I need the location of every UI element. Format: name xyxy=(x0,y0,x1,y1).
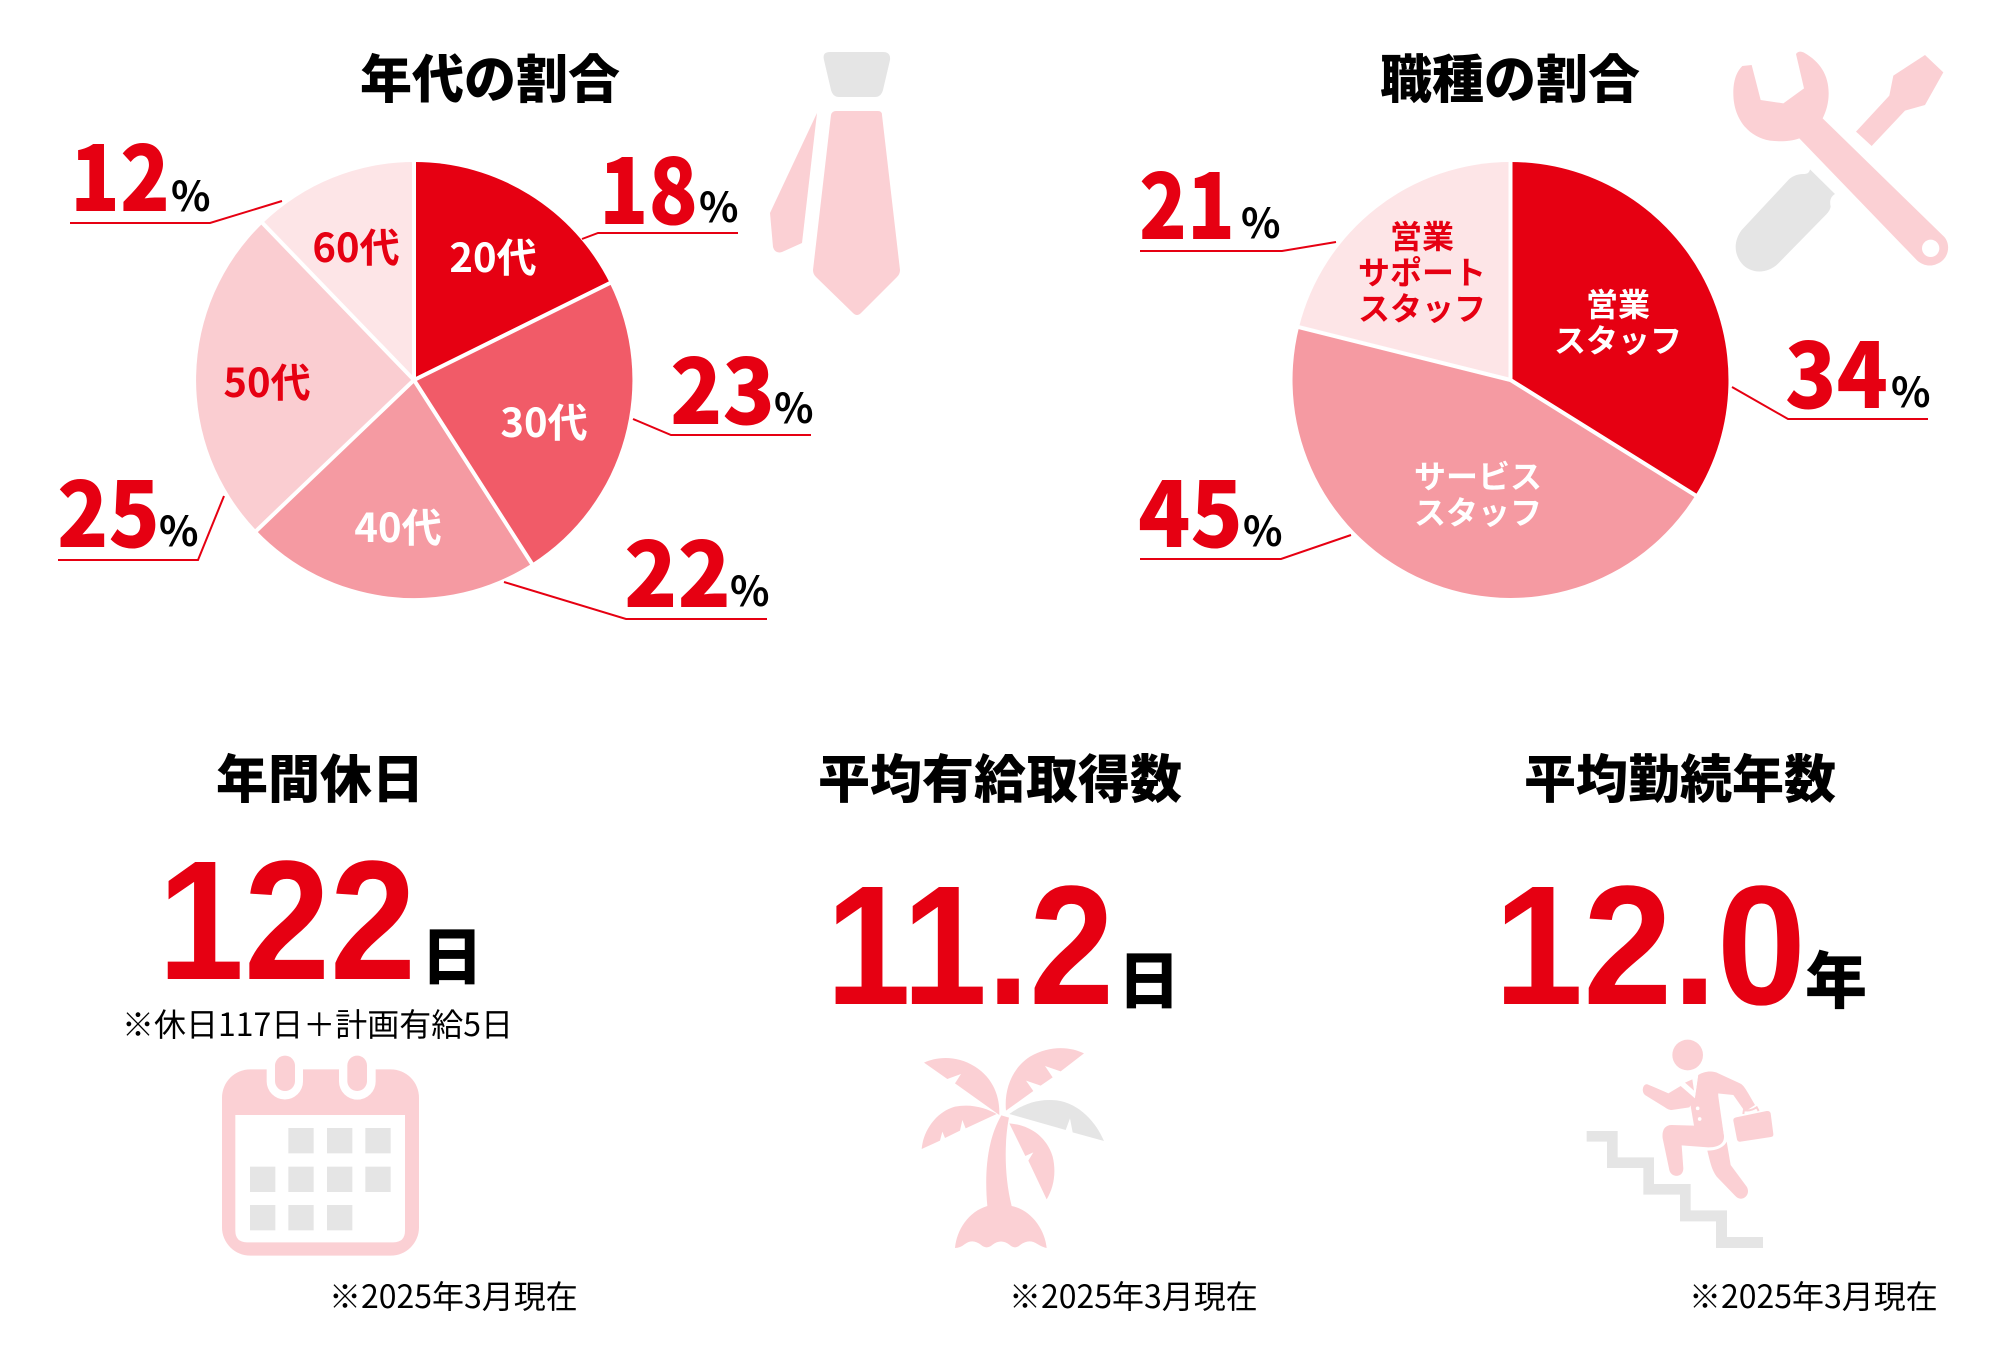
label: sales support staff: 営業 xyxy=(1390,212,1454,258)
callout: 34%: % xyxy=(1891,359,1930,419)
label: service staff: サービス xyxy=(1414,452,1542,498)
panel: age ratio xyxy=(57,38,900,633)
label: 60代: 60代 xyxy=(312,216,400,274)
icon: calendar xyxy=(222,1056,419,1256)
callout: 21% xyxy=(1139,135,1336,265)
note: as of March 2025: ※2025年3月現在 xyxy=(329,1272,578,1318)
callout: 12%: 12 xyxy=(70,107,170,237)
panel: job type ratio xyxy=(1138,38,1948,598)
pie chart: age xyxy=(196,160,632,598)
callout: 23%: % xyxy=(774,375,813,435)
callout: 45%: 45 xyxy=(1138,443,1243,573)
callout: 25% xyxy=(57,443,224,573)
callout: 45% xyxy=(1138,443,1351,573)
note: as of March 2025: ※2025年3月現在 xyxy=(1009,1272,1258,1318)
icon: palm tree xyxy=(922,1048,1104,1248)
heading: average years of service: 平均勤続年数 xyxy=(1524,738,1836,813)
heading: job type ratio: 職種の割合 xyxy=(1380,38,1640,113)
heading: age ratio: 年代の割合 xyxy=(360,38,620,113)
label: sales support staff: サポート xyxy=(1358,248,1486,294)
value: 11.2 days: 日 xyxy=(1118,931,1180,1021)
heading: annual holidays: 年間休日 xyxy=(216,738,424,813)
label: service staff: スタッフ xyxy=(1414,488,1542,534)
slice: service staff xyxy=(1293,327,1696,598)
callout: 18%: 18 xyxy=(599,120,698,250)
value: 12.0 years: 12.0 xyxy=(1494,851,1806,1041)
callout: 12%: % xyxy=(171,163,210,223)
icon: necktie xyxy=(770,52,900,315)
callout: 21%: % xyxy=(1241,190,1280,250)
slice: 30s xyxy=(414,283,632,564)
value: 122 days: 日 xyxy=(421,907,483,997)
label: sales support staff: スタッフ xyxy=(1358,284,1486,330)
slice: sales staff xyxy=(1510,162,1728,495)
callout: 22% xyxy=(504,503,769,633)
value: 12.0 years: 年 xyxy=(1805,931,1867,1021)
panel: average years of service xyxy=(1494,738,1938,1318)
label: 20代: 20代 xyxy=(449,226,537,284)
callout: 23%: 23 xyxy=(670,320,775,450)
label: 50代: 50代 xyxy=(223,351,311,409)
callout: 23% xyxy=(633,320,813,450)
pie chart: job type xyxy=(1293,160,1728,598)
callout: 22%: % xyxy=(730,558,769,618)
slice: sales support staff xyxy=(1299,162,1510,380)
label: 30代: 30代 xyxy=(500,391,588,449)
heading: average paid leave taken: 平均有給取得数 xyxy=(818,738,1182,813)
value: 11.2 days: 11.2 xyxy=(826,851,1114,1041)
panel: average paid leave taken xyxy=(818,738,1258,1318)
callout: 25%: 25 xyxy=(57,443,160,573)
slice: 50s xyxy=(196,223,414,531)
label: sales staff: 営業 xyxy=(1586,280,1650,326)
callout: 21%: 21 xyxy=(1139,135,1235,265)
callout: 34%: 34 xyxy=(1785,304,1888,434)
slice: 60s xyxy=(263,162,414,380)
value: 122 days: 122 xyxy=(158,826,416,1016)
panel: annual holidays xyxy=(122,738,578,1318)
slice: 40s xyxy=(256,380,532,598)
icon: wrench and screwdriver xyxy=(1733,52,1948,271)
note: as of March 2025: ※2025年3月現在 xyxy=(1689,1272,1938,1318)
callout: 12% xyxy=(70,107,282,237)
label: sales staff: スタッフ xyxy=(1554,316,1682,362)
note: holiday breakdown: ※休日117日＋計画有給5日 xyxy=(122,1000,513,1046)
icon: businessman climbing stairs xyxy=(1587,1040,1773,1248)
label: 40代: 40代 xyxy=(354,496,442,554)
callout: 25%: % xyxy=(159,498,198,558)
slice: 20s xyxy=(414,162,610,380)
callout: 22%: 22 xyxy=(624,503,731,633)
callout: 18%: % xyxy=(699,174,738,234)
callout: 45%: % xyxy=(1243,498,1282,558)
callout: 34% xyxy=(1732,304,1930,434)
